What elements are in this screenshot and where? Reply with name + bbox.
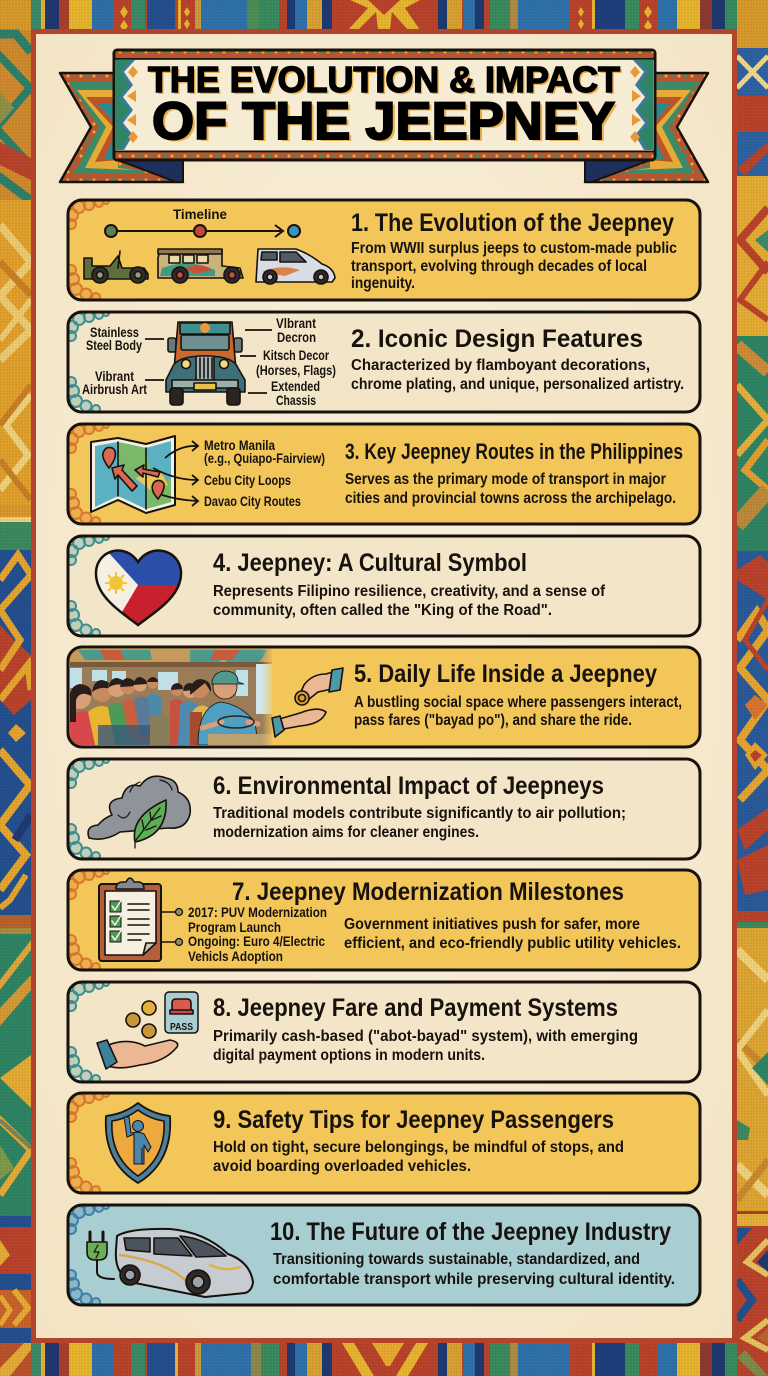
labels: design: Stainless: [90, 325, 139, 340]
icon: modern van: [256, 249, 335, 284]
text 9: [213, 1139, 624, 1175]
illustration: jeepney interior: [69, 649, 275, 745]
icon: smoke cloud and leaf: [88, 776, 190, 848]
labels: design: [82, 316, 336, 408]
right stripes: [737, 48, 768, 1350]
labels: routes: Metro Manila: [204, 438, 275, 453]
text 5: A bustling social space where passengers interact,: [354, 694, 682, 711]
passengers left: [70, 711, 95, 745]
passengers right: [170, 699, 184, 745]
labels: design: Steel Body: [86, 338, 142, 353]
text 3: [345, 471, 676, 507]
text 3: Serves as the primary mode of transport in major: [345, 471, 666, 488]
heading 8: 8. Jeepney Fare and Payment Systems: [213, 994, 618, 1022]
text 1: transport, evolving through decades of local: [351, 258, 647, 275]
labels: design: Chassis: [276, 393, 316, 408]
text 7: Government initiatives push for safer, more: [344, 916, 640, 933]
text 2: chrome plating, and unique, personalized artistry.: [351, 376, 684, 393]
labels: milestones: 2017: PUV Modernization: [188, 905, 327, 920]
panel 3: routes: [66, 422, 700, 525]
text 6: Traditional models contribute significantly to air pollution;: [213, 805, 626, 822]
heading 10: 10. The Future of the Jeepney Industry: [270, 1218, 671, 1246]
top stripes: [0, 0, 768, 48]
text 10: comfortable transport while preserving cultural identity.: [273, 1271, 675, 1288]
heading 6: 6. Environmental Impact of Jeepneys: [213, 772, 604, 800]
heading 2: 2. Iconic Design Features: [351, 325, 643, 353]
heading 9: 9. Safety Tips for Jeepney Passengers: [213, 1106, 614, 1134]
labels: design: Extended: [271, 379, 320, 394]
icon: classic jeepney: [158, 249, 243, 283]
panel 8: fares: [66, 980, 700, 1083]
icon: jeepney front: [166, 322, 245, 405]
labels: design: Decron: [277, 330, 316, 345]
title text: OF THE JEEPNEY: [152, 92, 615, 151]
labels: design: Kitsch Decor: [263, 348, 330, 363]
icon: map: [91, 436, 175, 513]
text 10: Transitioning towards sustainable, standardized, and: [273, 1251, 640, 1268]
labels: design: Airbrush Art: [82, 382, 147, 397]
text 8: digital payment options in modern units.: [213, 1047, 485, 1064]
text 9: Hold on tight, secure belongings, be mindful of stops, and: [213, 1139, 624, 1156]
icon: clipboard: [99, 878, 161, 961]
title text: THE EVOLUTION & IMPACT: [150, 61, 622, 102]
panel 4: cultural symbol: [66, 534, 700, 637]
text 1: ingenuity.: [351, 275, 415, 292]
text 9: avoid boarding overloaded vehicles.: [213, 1158, 471, 1175]
text 1: [351, 240, 677, 292]
left stripes: [0, 30, 31, 1343]
panel 6: environment: [66, 757, 700, 860]
labels: routes: [153, 438, 325, 509]
labels: design: (Horses, Flags): [256, 363, 336, 378]
title text: OF THE JEEPNEY: [155, 94, 618, 153]
text 10: [273, 1251, 675, 1288]
panel 7: modernization: [66, 868, 700, 971]
text 6: [213, 805, 626, 841]
text 4: community, often called the "King of the Road".: [213, 602, 552, 619]
text 4: [213, 583, 606, 619]
icon: plug: [87, 1232, 114, 1279]
icon: heart flag: [96, 550, 181, 625]
heading 3: 3. Key Jeepney Routes in the Philippines: [345, 439, 683, 464]
labels: routes: Cebu City Loops: [204, 473, 291, 488]
title text: THE EVOLUTION & IMPACT: [148, 59, 620, 100]
banner side patterns: [115, 60, 653, 150]
labels: milestones: Ongoing: Euro 4/Electric: [188, 934, 325, 949]
heading 1: 1. The Evolution of the Jeepney: [351, 209, 674, 237]
timeline: Timeline: [173, 207, 227, 222]
panel 1: evolution: [66, 198, 700, 301]
label: pass: PASS: [170, 1021, 193, 1033]
text 1: From WWII surplus jeeps to custom-made public: [351, 240, 677, 257]
panel 10: future: [66, 1203, 700, 1306]
panel 5: daily life: [68, 647, 700, 747]
text 2: [351, 357, 684, 393]
panel 2: design features: [66, 310, 700, 413]
icon: military jeep: [84, 251, 148, 283]
labels: milestones: Vehicls Adoption: [188, 949, 283, 964]
text 6: modernization aims for cleaner engines.: [213, 824, 479, 841]
ribbon tail right: [585, 73, 708, 182]
text 4: Represents Filipino resilience, creativity, and a sense of: [213, 583, 606, 600]
labels: milestones: Program Launch: [188, 920, 281, 935]
labels: routes: Davao City Routes: [204, 494, 301, 509]
icon: shield with passenger: [106, 1103, 170, 1183]
icon: hand with coin: [272, 668, 343, 737]
text 8: Primarily cash-based ("abot-bayad" system), with emerging: [213, 1028, 638, 1045]
labels: design: Vibrant: [95, 369, 134, 384]
labels: design: Vlbrant: [276, 316, 316, 331]
icon: electric van: [116, 1229, 253, 1297]
text 8: [213, 1028, 638, 1064]
text 7: [344, 916, 681, 952]
banner body: [114, 50, 655, 160]
title banner: [60, 50, 708, 182]
labels: milestones: [162, 905, 327, 964]
panel 9: safety: [66, 1091, 700, 1194]
labels: routes: (e.g., Quiapo-Fairview): [204, 451, 325, 466]
icon: hand, coins and pass: [97, 992, 198, 1069]
title text: [148, 59, 622, 153]
driver: [198, 671, 258, 745]
bottom stripes: [0, 1343, 768, 1376]
heading 7: 7. Jeepney Modernization Milestones: [232, 878, 624, 906]
heading 4: 4. Jeepney: A Cultural Symbol: [213, 549, 527, 577]
ribbon tail left: [60, 73, 183, 182]
timeline: [105, 207, 300, 237]
text 7: efficient, and eco-friendly public utility vehicles.: [344, 935, 681, 952]
text 2: Characterized by flamboyant decorations,: [351, 357, 650, 374]
text 5: [354, 694, 682, 729]
text 3: cities and provincial towns across the archipelago.: [345, 490, 676, 507]
heading 5: 5. Daily Life Inside a Jeepney: [354, 660, 657, 688]
text 5: pass fares ("bayad po"), and share the ride.: [354, 712, 632, 729]
